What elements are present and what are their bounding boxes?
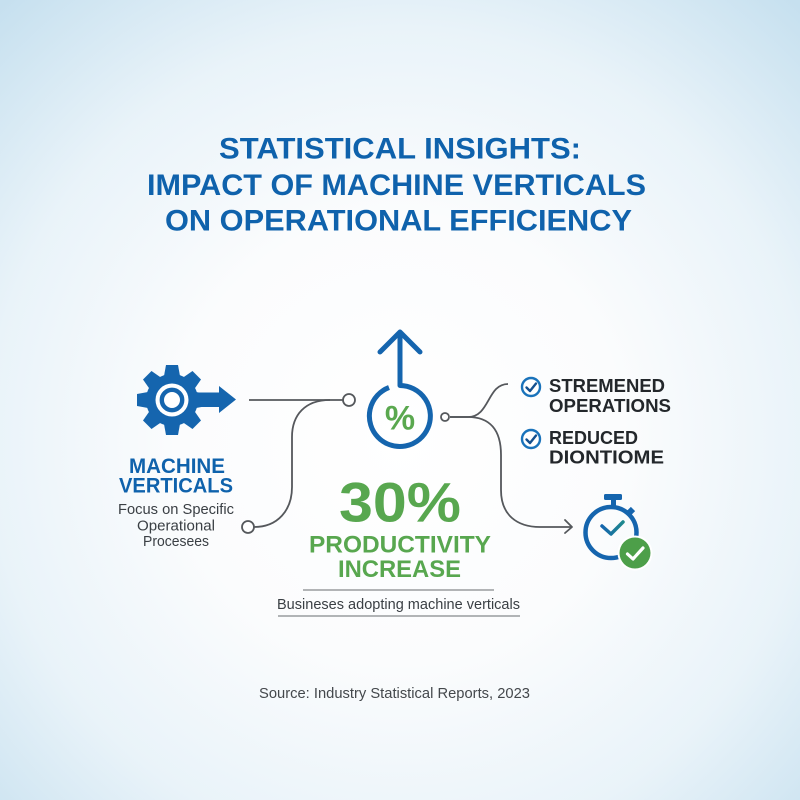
benefit: reduced downtime: DIONTIOME — [549, 446, 664, 468]
text: machine verticals description: Focus on Specific — [118, 502, 234, 518]
text: machine verticals description — [118, 502, 234, 550]
source: Source: Industry Statistical Reports, 2023 — [259, 686, 530, 702]
benefit: streamlined operations: OPERATIONS — [549, 395, 671, 416]
title — [147, 132, 646, 238]
icon: gear with arrow — [137, 365, 236, 435]
text: machine verticals description: Operational — [137, 518, 215, 534]
heading: machine verticals: MACHINE — [129, 455, 225, 478]
connector: percent to benefits — [441, 384, 572, 533]
caption: businesses adopting — [277, 590, 520, 616]
icon: stopwatch with check — [586, 494, 652, 570]
title: ON OPERATIONAL EFFICIENCY — [165, 204, 632, 238]
title: STATISTICAL INSIGHTS: — [219, 132, 581, 166]
heading: productivity increase: INCREASE — [338, 556, 461, 583]
benefit: reduced downtime — [522, 427, 664, 468]
benefit: reduced downtime: REDUCED — [549, 427, 638, 448]
heading: productivity increase — [309, 532, 491, 583]
caption: businesses adopting: Busineses adopting machine verticals — [277, 597, 520, 613]
icon: percent circle with up arrow: % — [385, 400, 415, 438]
text: machine verticals description: Procesees — [143, 534, 209, 550]
benefit: streamlined operations: STREMENED — [549, 375, 665, 396]
benefit: streamlined operations — [522, 375, 671, 416]
statistic: 30%: 30% — [339, 470, 461, 534]
heading: productivity increase: PRODUCTIVITY — [309, 532, 491, 558]
icon: percent circle with up arrow — [369, 332, 430, 446]
heading: machine verticals — [119, 455, 233, 498]
title: IMPACT OF MACHINE VERTICALS — [147, 169, 646, 202]
heading: machine verticals: VERTICALS — [119, 474, 233, 498]
connector: gear to percent — [242, 394, 355, 533]
